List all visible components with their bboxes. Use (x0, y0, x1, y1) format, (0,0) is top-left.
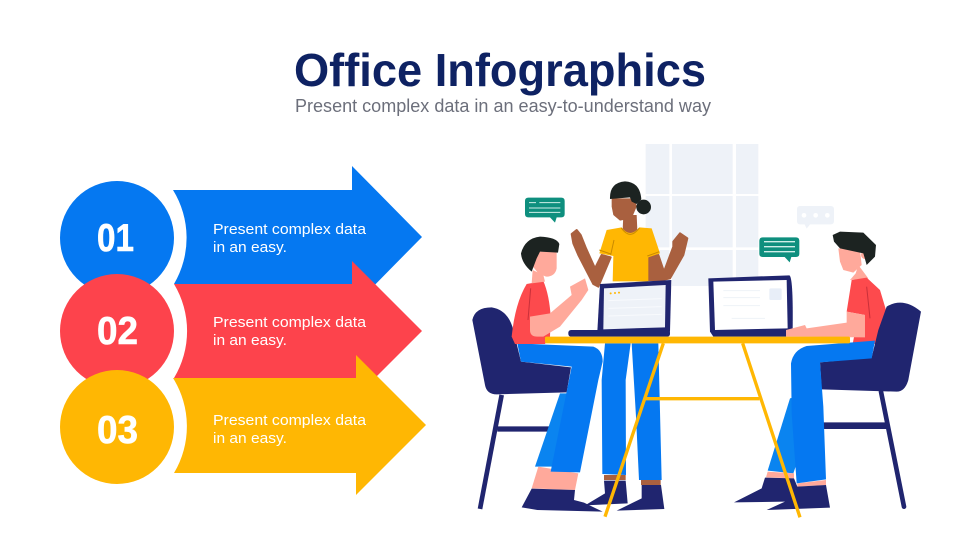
front leg (791, 341, 875, 483)
shoes (734, 478, 830, 510)
woman head (612, 198, 637, 221)
arrow 03: in an easy. (213, 431, 287, 447)
woman neck (623, 215, 637, 234)
arrow 02: in an easy. (213, 333, 287, 349)
back leg (535, 393, 580, 467)
hair (521, 237, 559, 272)
icon: grey chat bubble (797, 206, 834, 229)
arrow 01: Present complex data (213, 222, 367, 238)
arrow 03 (173, 355, 426, 495)
number circle 03: 03 (97, 409, 138, 452)
right man upper body (833, 232, 886, 344)
left laptop (568, 280, 671, 337)
woman standing (572, 181, 687, 511)
arrow 03: Present complex data (213, 413, 367, 429)
right man face (838, 248, 862, 273)
face (532, 252, 557, 277)
right man shirt (847, 278, 886, 344)
right man arm (786, 312, 865, 337)
front leg (517, 343, 603, 472)
icon: left chat bubble (525, 198, 565, 223)
table (545, 337, 850, 517)
woman ankles (604, 475, 661, 485)
arrow 01 (173, 166, 422, 308)
ankles (766, 472, 826, 487)
number circle 01: 01 (97, 217, 134, 260)
window (646, 144, 758, 286)
panel: numbered arrow list (60, 166, 426, 495)
woman right arm (648, 233, 687, 280)
left chair (472, 307, 571, 509)
number circle 02: 02 (97, 310, 138, 353)
number circle 03 (60, 370, 174, 484)
illustration: office meeting (472, 144, 921, 517)
neck (532, 270, 545, 283)
right man hair (833, 232, 876, 265)
back leg (768, 390, 822, 473)
left man (512, 237, 603, 512)
left man ankle (532, 467, 578, 490)
subtitle: Present complex data in an easy-to-understand way (295, 96, 711, 116)
arrow 02: Present complex data (213, 315, 367, 331)
woman legs (602, 343, 631, 475)
woman shirt (599, 227, 660, 281)
right man lower body (734, 341, 875, 510)
right laptop (708, 275, 793, 337)
right chair (820, 303, 921, 507)
arrow 02 (174, 261, 422, 401)
number circle 02 (60, 274, 174, 388)
arm (530, 278, 588, 337)
icon: right chat bubble (759, 237, 799, 262)
right man ear (861, 251, 869, 259)
right man neck (850, 265, 868, 280)
arrow 01: in an easy. (213, 240, 287, 256)
woman shoes (585, 481, 664, 511)
title: Office Infographics (294, 44, 706, 96)
woman left arm (572, 230, 611, 287)
left man shoes (522, 489, 603, 512)
number circle 01 (60, 181, 174, 295)
shirt (512, 281, 551, 344)
